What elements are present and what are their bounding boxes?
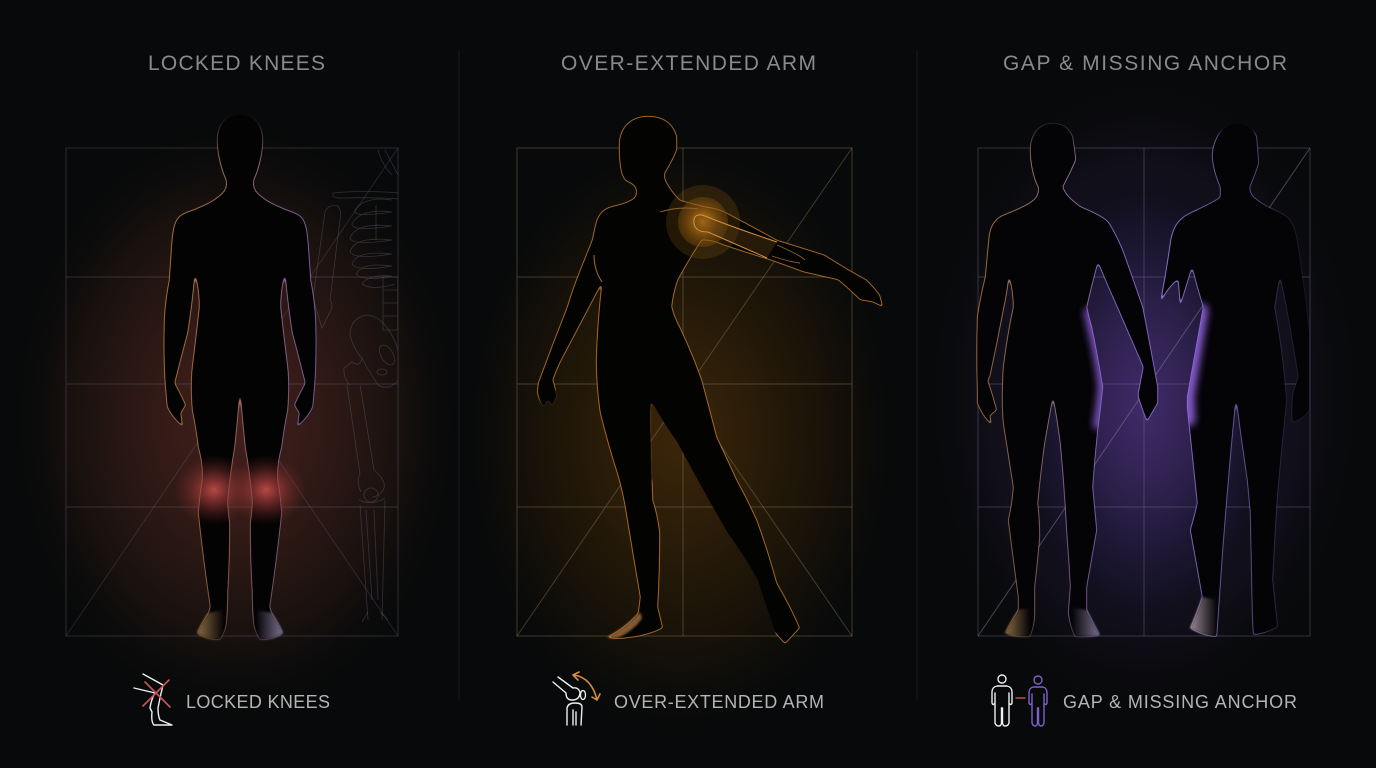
lit foot — [607, 612, 642, 638]
lit foot: left — [197, 610, 224, 640]
inner body contour — [594, 255, 602, 282]
title: over-extended arm: OVER-EXTENDED ARM — [561, 52, 816, 75]
icon: crossed-out locked knee — [134, 674, 172, 725]
proportion grid — [66, 148, 398, 636]
title: gap and missing anchor: GAP & MISSING ANCHOR — [1003, 52, 1287, 75]
lit foot: right — [1072, 608, 1100, 637]
shoulder glow outer ring — [666, 185, 740, 259]
silhouette: right figure with missing arm — [1160, 123, 1310, 637]
lit foot: left — [1005, 608, 1030, 637]
silhouette: reaching figure — [537, 116, 883, 644]
panel: locked knees — [50, 116, 423, 666]
label: locked knees: LOCKED KNEES — [186, 692, 330, 712]
violet glow between figures — [1010, 170, 1280, 640]
silhouette: left figure — [976, 123, 1158, 637]
title: locked knees: LOCKED KNEES — [148, 52, 325, 75]
silhouette: front figure — [164, 114, 316, 640]
label: gap and missing anchor: GAP & MISSING ANCHOR — [1063, 692, 1297, 712]
skeleton overlay — [313, 150, 400, 622]
knee glow: right — [226, 455, 306, 525]
lit foot: right — [256, 610, 283, 640]
label: over-extended arm: OVER-EXTENDED ARM — [614, 692, 824, 712]
forearm bones — [660, 208, 805, 263]
red ambient glow — [1, 110, 471, 730]
proportion grid — [978, 148, 1310, 636]
icon: two figures with a gap — [992, 675, 1047, 726]
wide violet ambient — [919, 65, 1369, 725]
inner torso glow: left figure — [1089, 312, 1103, 425]
panel: over-extended arm — [502, 116, 882, 680]
lit heel — [1190, 597, 1217, 636]
divider lines — [459, 50, 917, 700]
humerus bone — [694, 215, 777, 258]
panel: gap and missing anchor — [968, 122, 1321, 654]
shoulder glow inner ring — [678, 197, 728, 247]
inner torso glow: right figure — [1188, 310, 1202, 420]
amber ambient glow — [455, 125, 905, 745]
proportion grid — [517, 148, 852, 636]
icon: over-extended joint — [553, 672, 600, 725]
knee glow: left — [174, 455, 254, 525]
